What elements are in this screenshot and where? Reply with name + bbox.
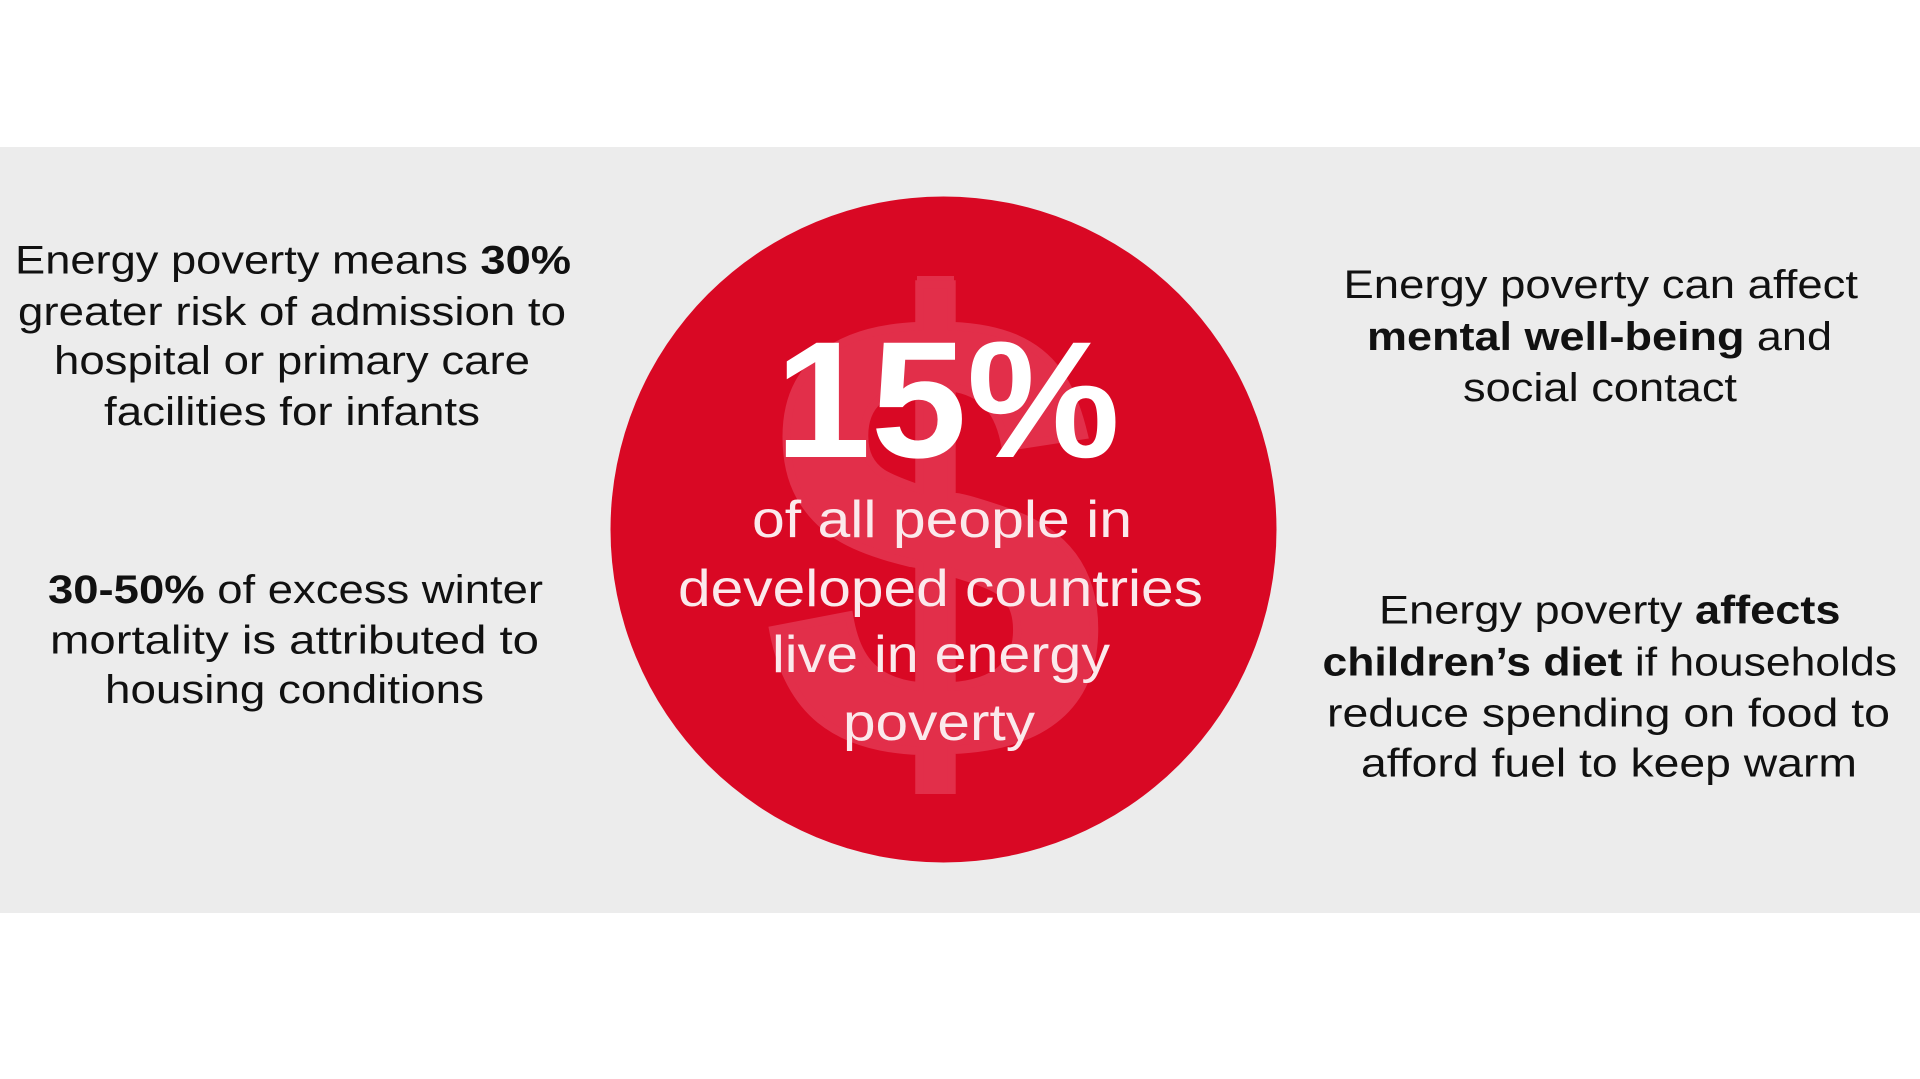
text: mental well-being: social contact [1463,366,1737,410]
text: children's diet: afford fuel to keep warm [1361,742,1857,786]
text: children's diet: reduce spending on food to [1327,692,1890,736]
text: children's diet: children’s diet if households [1322,640,1897,684]
circle caption [678,491,1203,752]
text: hospital admission risk: facilities for infants [104,390,480,434]
text: hospital admission risk: Energy poverty means 30% [15,238,571,282]
text: excess winter mortality [48,568,543,712]
text: children's diet: Energy poverty affects [1379,588,1840,632]
text: mental well-being [1344,263,1858,410]
text: excess winter mortality: mortality is attributed to [50,618,539,662]
circle caption: of all people in [752,491,1132,549]
text: children's diet [1322,588,1897,786]
text: excess winter mortality: housing conditions [105,668,484,712]
text: hospital admission risk: greater risk of admission to [18,290,566,334]
circle background [610,196,1276,862]
circle caption: poverty [843,694,1035,752]
circle caption: live in energy [772,626,1110,684]
circle caption: developed countries [678,560,1203,618]
text: excess winter mortality: 30-50% of excess winter [48,568,543,612]
red circle with statistic [610,181,1276,892]
big number 15%: 15% [775,308,1120,493]
panel: grey band [0,147,1920,913]
text: mental well-being: Energy poverty can affect [1344,263,1858,307]
text: hospital admission risk: hospital or primary care [54,339,530,383]
text: hospital admission risk [15,238,571,434]
icon: dollar sign watermark: $ [765,181,1103,892]
text: mental well-being: mental well-being and [1367,315,1832,359]
